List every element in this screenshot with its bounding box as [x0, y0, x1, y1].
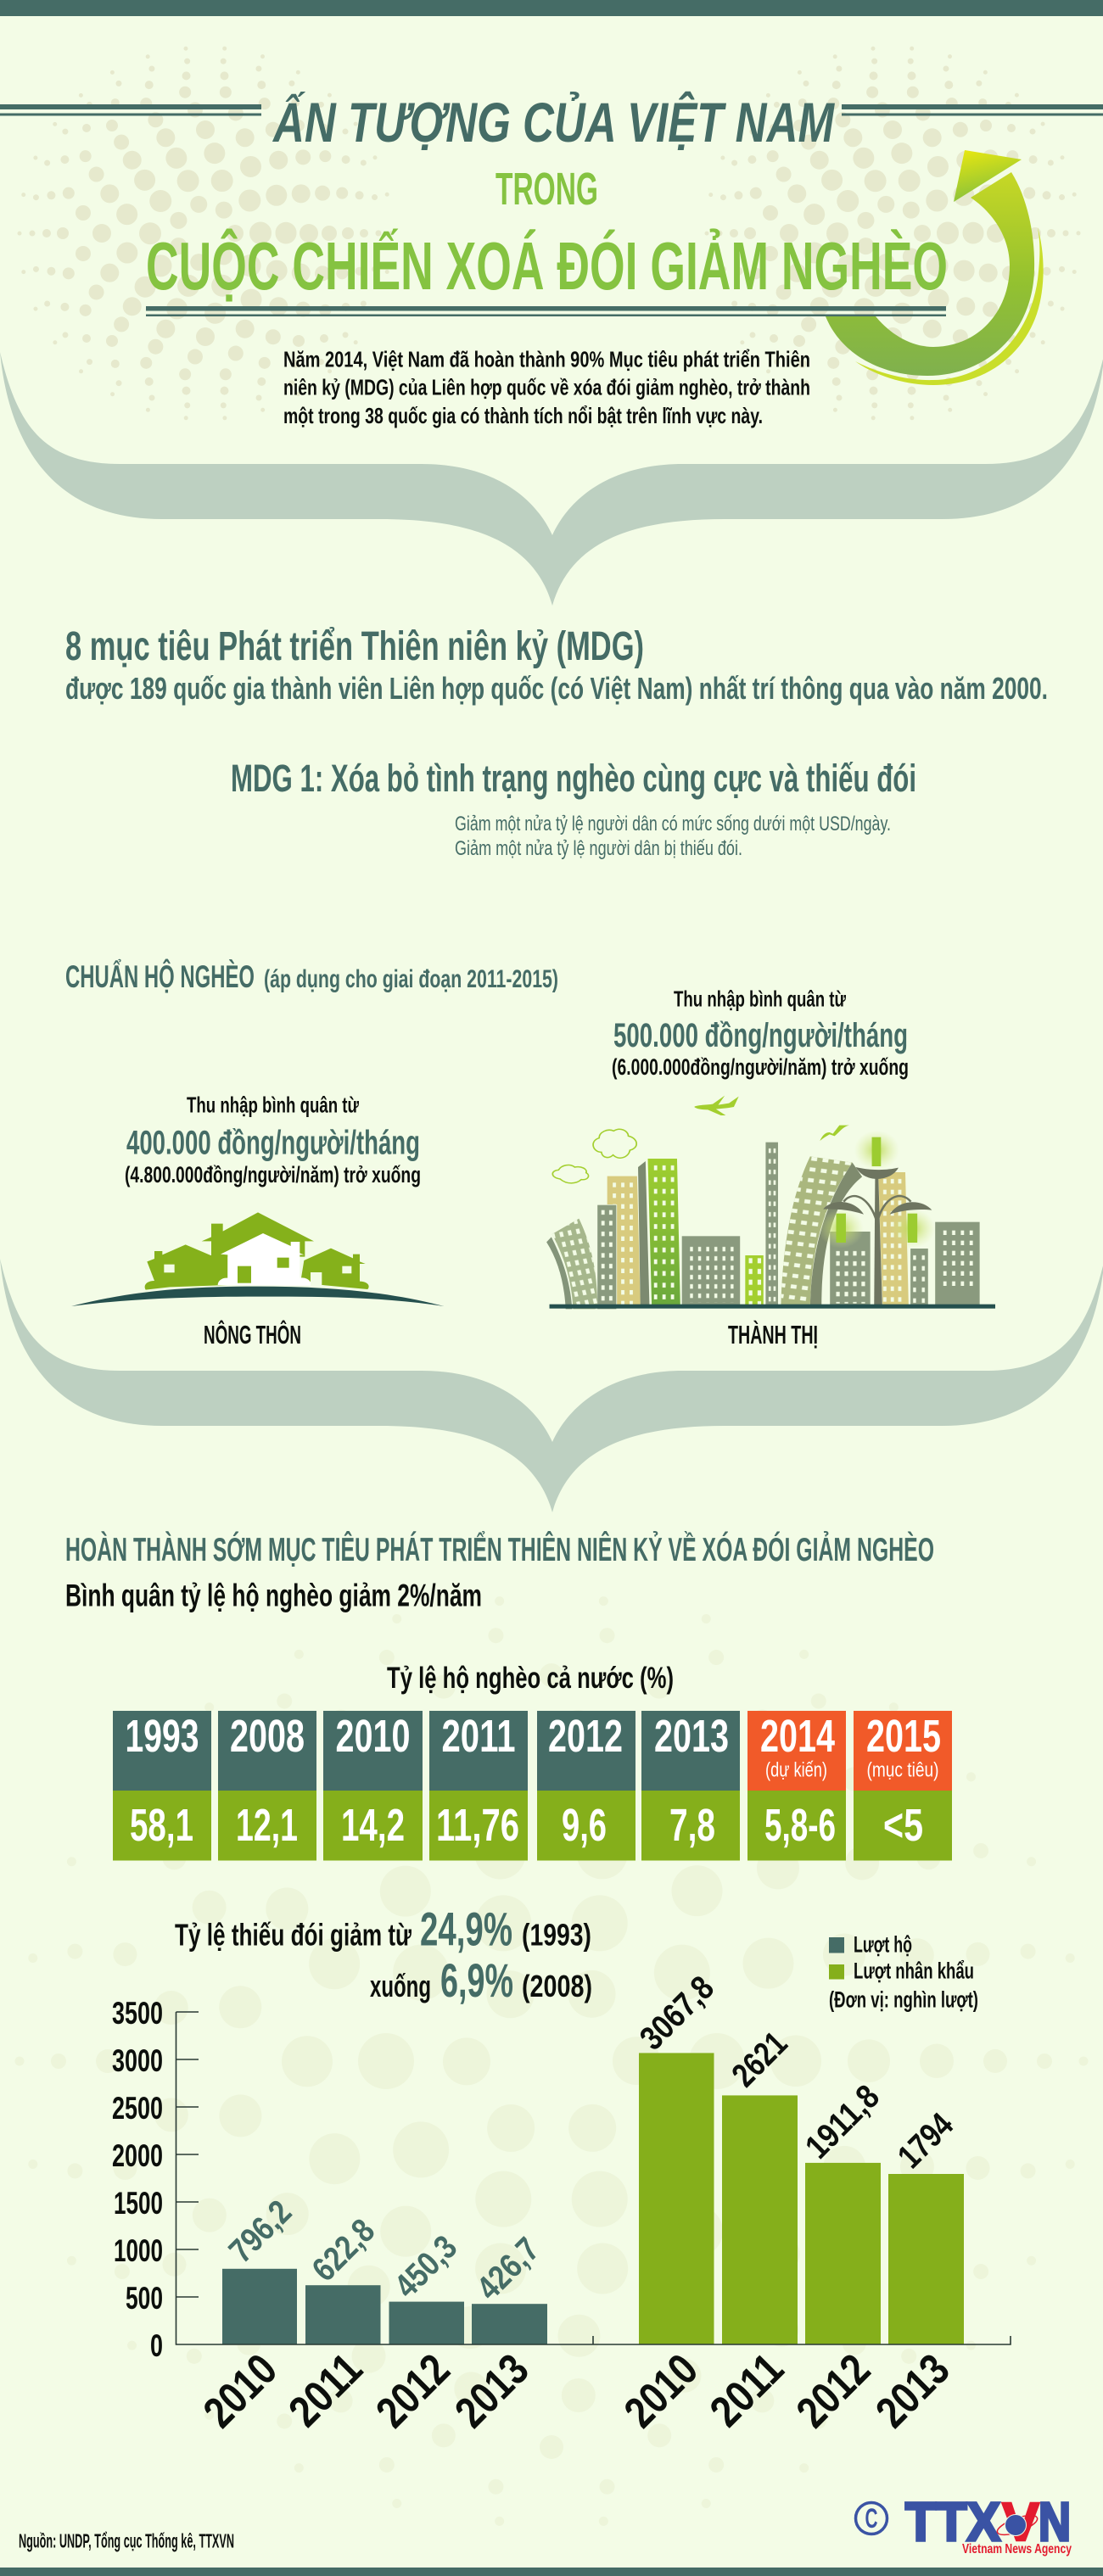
- rural income block: Thu nhập bình quân từ: [187, 1092, 359, 1118]
- intro paragraph: Năm 2014, Việt Nam đã hoàn thành 90% Mục tiêu phát triển Thiên: [283, 346, 810, 372]
- x axis labels: 2010: [194, 2345, 287, 2437]
- title: trong: TRONG: [496, 164, 598, 215]
- y axis labels: 3500: [112, 1996, 163, 2031]
- heading: poverty line: [65, 958, 558, 994]
- heading: 8 MDG goals: 8 mục tiêu Phát triển Thiên niên kỷ (MDG): [65, 624, 644, 669]
- icon: bird: [820, 1126, 849, 1141]
- year labels: 2012: [548, 1711, 623, 1762]
- year labels: 2014: [760, 1711, 835, 1762]
- year header cells: [113, 1711, 952, 1791]
- year labels: 2011: [441, 1711, 516, 1762]
- intro paragraph: [283, 346, 810, 428]
- rural income block: [125, 1092, 421, 1187]
- year labels: 2010: [336, 1711, 411, 1762]
- teal value labels: 796,2: [222, 2193, 299, 2270]
- heading: 8 MDG goals: [65, 624, 1048, 706]
- x axis labels: 2012: [787, 2345, 880, 2437]
- rate values: 58,1: [130, 1800, 193, 1851]
- urban income block: (6.000.000đồng/người/năm) trở xuống: [612, 1054, 909, 1080]
- rate values: 12,1: [236, 1800, 298, 1851]
- teal bars: [222, 2269, 547, 2344]
- teal value labels: [222, 2193, 546, 2307]
- year labels: 2015: [866, 1711, 941, 1762]
- y axis labels: 2500: [112, 2091, 163, 2126]
- intro paragraph: một trong 38 quốc gia có thành tích nổi bật trên lĩnh vực này.: [283, 403, 763, 428]
- title: Ấn tượng của Việt Nam: ẤN TƯỢNG CỦA VIỆT NAM: [272, 91, 836, 154]
- intro paragraph: niên kỷ (MDG) của Liên hợp quốc về xóa đói giảm nghèo, trở thành: [283, 375, 810, 400]
- rate values: 7,8: [669, 1800, 715, 1851]
- icon: city skyline with street lamp: [546, 1096, 995, 1309]
- urban income block: [612, 986, 909, 1080]
- title underline rules: [146, 306, 946, 316]
- icon: green circular arrow: [826, 150, 1044, 385]
- green value labels: 3067,8: [633, 1970, 721, 2057]
- logo: TTXVN: C: [865, 2503, 877, 2534]
- x axis labels: 2010: [615, 2345, 708, 2437]
- label: urban: THÀNH THỊ: [728, 1320, 818, 1349]
- buildings: [546, 1143, 980, 1309]
- logo: TTXVN: V: [1002, 2491, 1039, 2552]
- rate values: 9,6: [562, 1800, 607, 1851]
- chart legend: Lượt nhân khẩu: [854, 1958, 974, 1983]
- year notes: [765, 1759, 938, 1781]
- green value labels: 1911,8: [798, 2078, 887, 2166]
- teal value labels: 426,7: [470, 2231, 546, 2307]
- subheading: average decline: Bình quân tỷ lệ hộ nghèo giảm 2%/năm: [65, 1578, 482, 1613]
- title rules right: [842, 104, 1103, 115]
- axes: [176, 2012, 1011, 2344]
- year labels: 2013: [654, 1711, 729, 1762]
- green value labels: 1794: [891, 2106, 960, 2176]
- chart legend: Lượt hộ: [854, 1932, 912, 1958]
- MDG 1 targets: [455, 813, 891, 860]
- year labels: 1993: [126, 1711, 199, 1762]
- value cells: [113, 1791, 952, 1861]
- chart legend: (Đơn vị: nghìn lượt): [829, 1986, 978, 2012]
- year labels: 2008: [230, 1711, 305, 1762]
- rate values: 5,8-6: [764, 1800, 836, 1851]
- brace divider 1: [0, 352, 1103, 606]
- y axis labels: 500: [126, 2281, 163, 2316]
- x axis labels: [194, 2344, 959, 2437]
- rate values: <5: [883, 1800, 923, 1851]
- table title: Tỷ lệ hộ nghèo cả nước (%): [387, 1662, 674, 1695]
- ground line: [550, 1305, 995, 1309]
- hunger rate statement: (2008): [522, 1969, 592, 2003]
- year labels: [126, 1711, 941, 1762]
- heading: poverty line: CHUẨN HỘ NGHÈO: [65, 958, 255, 994]
- icon: rural houses: [71, 1212, 444, 1306]
- x axis labels: 2011: [280, 2344, 372, 2436]
- logo: TTXVN: [855, 2491, 1072, 2556]
- title rules left: [0, 104, 261, 115]
- rate values: 11,76: [436, 1800, 519, 1851]
- bar chart: households and people: [112, 1970, 1011, 2437]
- year notes: (dự kiến): [765, 1759, 827, 1781]
- MDG 1 targets: Giảm một nửa tỷ lệ người dân bị thiếu đói.: [455, 837, 742, 860]
- teal value labels: 622,8: [305, 2212, 382, 2288]
- teal value labels: 450,3: [388, 2228, 464, 2305]
- street lamp: [818, 1131, 935, 1305]
- rural income block: 400.000 đồng/người/tháng: [126, 1125, 420, 1162]
- x axis labels: 2013: [867, 2345, 959, 2437]
- urban income block: 500.000 đồng/người/tháng: [613, 1017, 908, 1054]
- green value labels: 2621: [725, 2025, 795, 2094]
- y axis labels: 2000: [112, 2138, 163, 2173]
- brace divider 2: [0, 1259, 1103, 1512]
- icon: airplane: [694, 1096, 739, 1115]
- top bar: [0, 0, 1103, 16]
- urban income block: Thu nhập bình quân từ: [674, 986, 846, 1011]
- hunger rate statement: Tỷ lệ thiếu đói giảm từ: [175, 1917, 412, 1953]
- x axis labels: 2011: [701, 2344, 793, 2436]
- y axis labels: 1500: [114, 2186, 163, 2221]
- heading: poverty line: (áp dụng cho giai đoạn 2011-2015): [264, 965, 558, 993]
- icon: clouds: [552, 1129, 636, 1183]
- logo: TTXVN: N: [1039, 2491, 1071, 2552]
- green bars: [639, 2053, 964, 2344]
- hunger rate statement: 24,9%: [420, 1902, 512, 1956]
- rate values: [130, 1800, 923, 1851]
- hunger rate statement: [175, 1902, 592, 2007]
- label: rural: NÔNG THÔN: [204, 1319, 301, 1349]
- rural income block: (4.800.000đồng/người/năm) trở xuống: [125, 1162, 421, 1187]
- hunger rate statement: xuống: [370, 1969, 431, 2003]
- logo: TTXVN: Vietnam News Agency: [962, 2542, 1072, 2556]
- source note: Nguồn: UNDP, Tổng cục Thống kê, TTXVN: [19, 2529, 234, 2551]
- rate values: 14,2: [341, 1800, 405, 1851]
- x axis labels: 2013: [446, 2345, 538, 2437]
- hunger rate statement: 6,9%: [440, 1953, 513, 2007]
- green value labels: [633, 1970, 960, 2176]
- logo: TTXVN: TTX: [905, 2491, 1000, 2552]
- chart legend: [829, 1932, 978, 2012]
- y axis labels: 3000: [112, 2043, 163, 2078]
- bottom bar: [0, 2568, 1103, 2576]
- x axis labels: 2012: [367, 2345, 459, 2437]
- MDG 1 targets: Giảm một nửa tỷ lệ người dân có mức sống dưới một USD/ngày.: [455, 813, 891, 835]
- y axis labels: [112, 1996, 163, 2363]
- y axis labels: 0: [150, 2328, 163, 2363]
- year notes: (mục tiêu): [867, 1759, 938, 1781]
- y axis labels: 1000: [114, 2233, 163, 2268]
- table: poverty rate by year: [113, 1711, 952, 1861]
- hunger rate statement: (1993): [522, 1917, 591, 1953]
